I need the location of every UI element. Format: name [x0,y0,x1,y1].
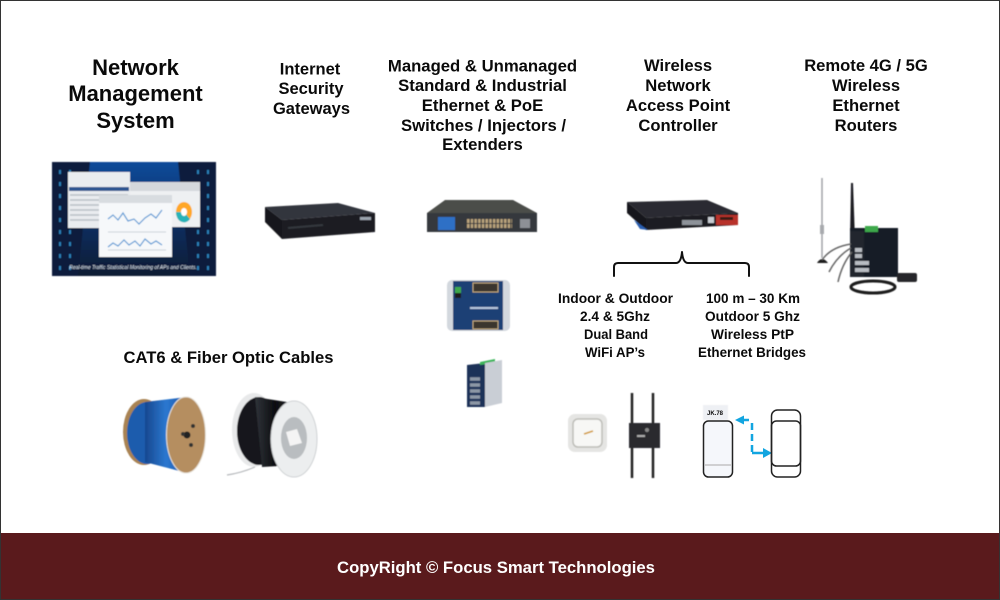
heading: Wireless Network Access Point Controller: Access Point [626,96,731,115]
heading: Remote 4G / 5G Wireless Ethernet Routers: Remote 4G / 5G [804,56,928,75]
heading: Remote 4G / 5G Wireless Ethernet Routers: Routers [835,116,897,135]
image: blue CAT6 cable reel [123,397,206,473]
image: PtP bridge unit one [703,405,732,477]
heading: Internet Security Gateways: Internet [280,60,341,78]
image: managed Ethernet switch [427,200,537,232]
image: indoor access point [568,414,607,452]
image: outdoor access point with antennas [629,393,660,478]
image: network management dashboard [52,162,216,276]
heading: Network Management System: System [96,108,175,133]
label: wireless access points: WiFi AP’s [585,345,645,360]
image: network management dashboard: Real-time Traffic Statistical Monitoring of APs and Clients. [69,265,197,271]
image: PtP bridge unit one: JK.78 [707,411,724,417]
label: wireless bridges: 100 m – 30 Km [706,291,800,306]
heading: Managed and Unmanaged switches: Managed & Unmanaged [388,56,577,76]
heading: Internet Security Gateways: Gateways [273,100,350,118]
footer band [1,533,999,599]
heading: Wireless Network Access Point Controller: Wireless [644,56,712,75]
bracket: controller to wireless products [614,252,749,276]
heading: Remote 4G / 5G Wireless Ethernet Routers: Ethernet [832,96,900,115]
heading: Managed and Unmanaged switches: Ethernet & PoE [422,96,543,115]
label: wireless access points: 2.4 & 5Ghz [580,309,650,324]
image: black fiber optic cable reel [227,393,317,477]
label: wireless bridges: Ethernet Bridges [698,345,806,360]
label: wireless bridges: Outdoor 5 Ghz [705,309,800,324]
image: PtP bridge unit two [772,410,800,477]
heading: Managed and Unmanaged switches: Extenders [442,135,523,154]
heading: Wireless Network Access Point Controller: Controller [638,116,718,135]
heading: Internet Security Gateways [273,60,350,118]
heading: Wireless Network Access Point Controller [626,56,731,135]
heading: Network Management System: Network [92,55,180,80]
heading: Network Management System [68,55,203,133]
heading: Managed and Unmanaged switches: Switches / Injectors / [401,116,566,135]
label: wireless bridges: Wireless PtP [711,327,794,342]
footer: copyright text: CopyRight © Focus Smart Technologies [337,558,655,577]
label: wireless bridges [698,291,806,360]
heading: Managed and Unmanaged switches [388,56,577,154]
heading: CAT6 and fiber optic cables: CAT6 & Fiber Optic Cables [124,348,333,367]
heading: Internet Security Gateways: Security [278,80,344,98]
heading: Remote 4G / 5G Wireless Ethernet Routers: Wireless [832,76,900,95]
arrow: wireless link between bridges [735,416,772,458]
image: 4G/5G router with antennas [817,178,917,293]
image: security gateway appliance [265,203,375,239]
heading: Network Management System: Management [68,81,203,106]
label: wireless access points [558,291,674,360]
label: wireless access points: Dual Band [584,327,648,342]
image: wireless controller appliance [627,200,738,230]
image: industrial DIN-rail switch [467,359,502,407]
image: wall-mount PoE switch [447,280,510,331]
heading: Wireless Network Access Point Controller: Network [645,76,712,95]
heading: Managed and Unmanaged switches: Standard & Industrial [398,76,567,95]
heading: Remote 4G / 5G Wireless Ethernet Routers [804,56,928,135]
label: wireless access points: Indoor & Outdoor [558,291,674,306]
